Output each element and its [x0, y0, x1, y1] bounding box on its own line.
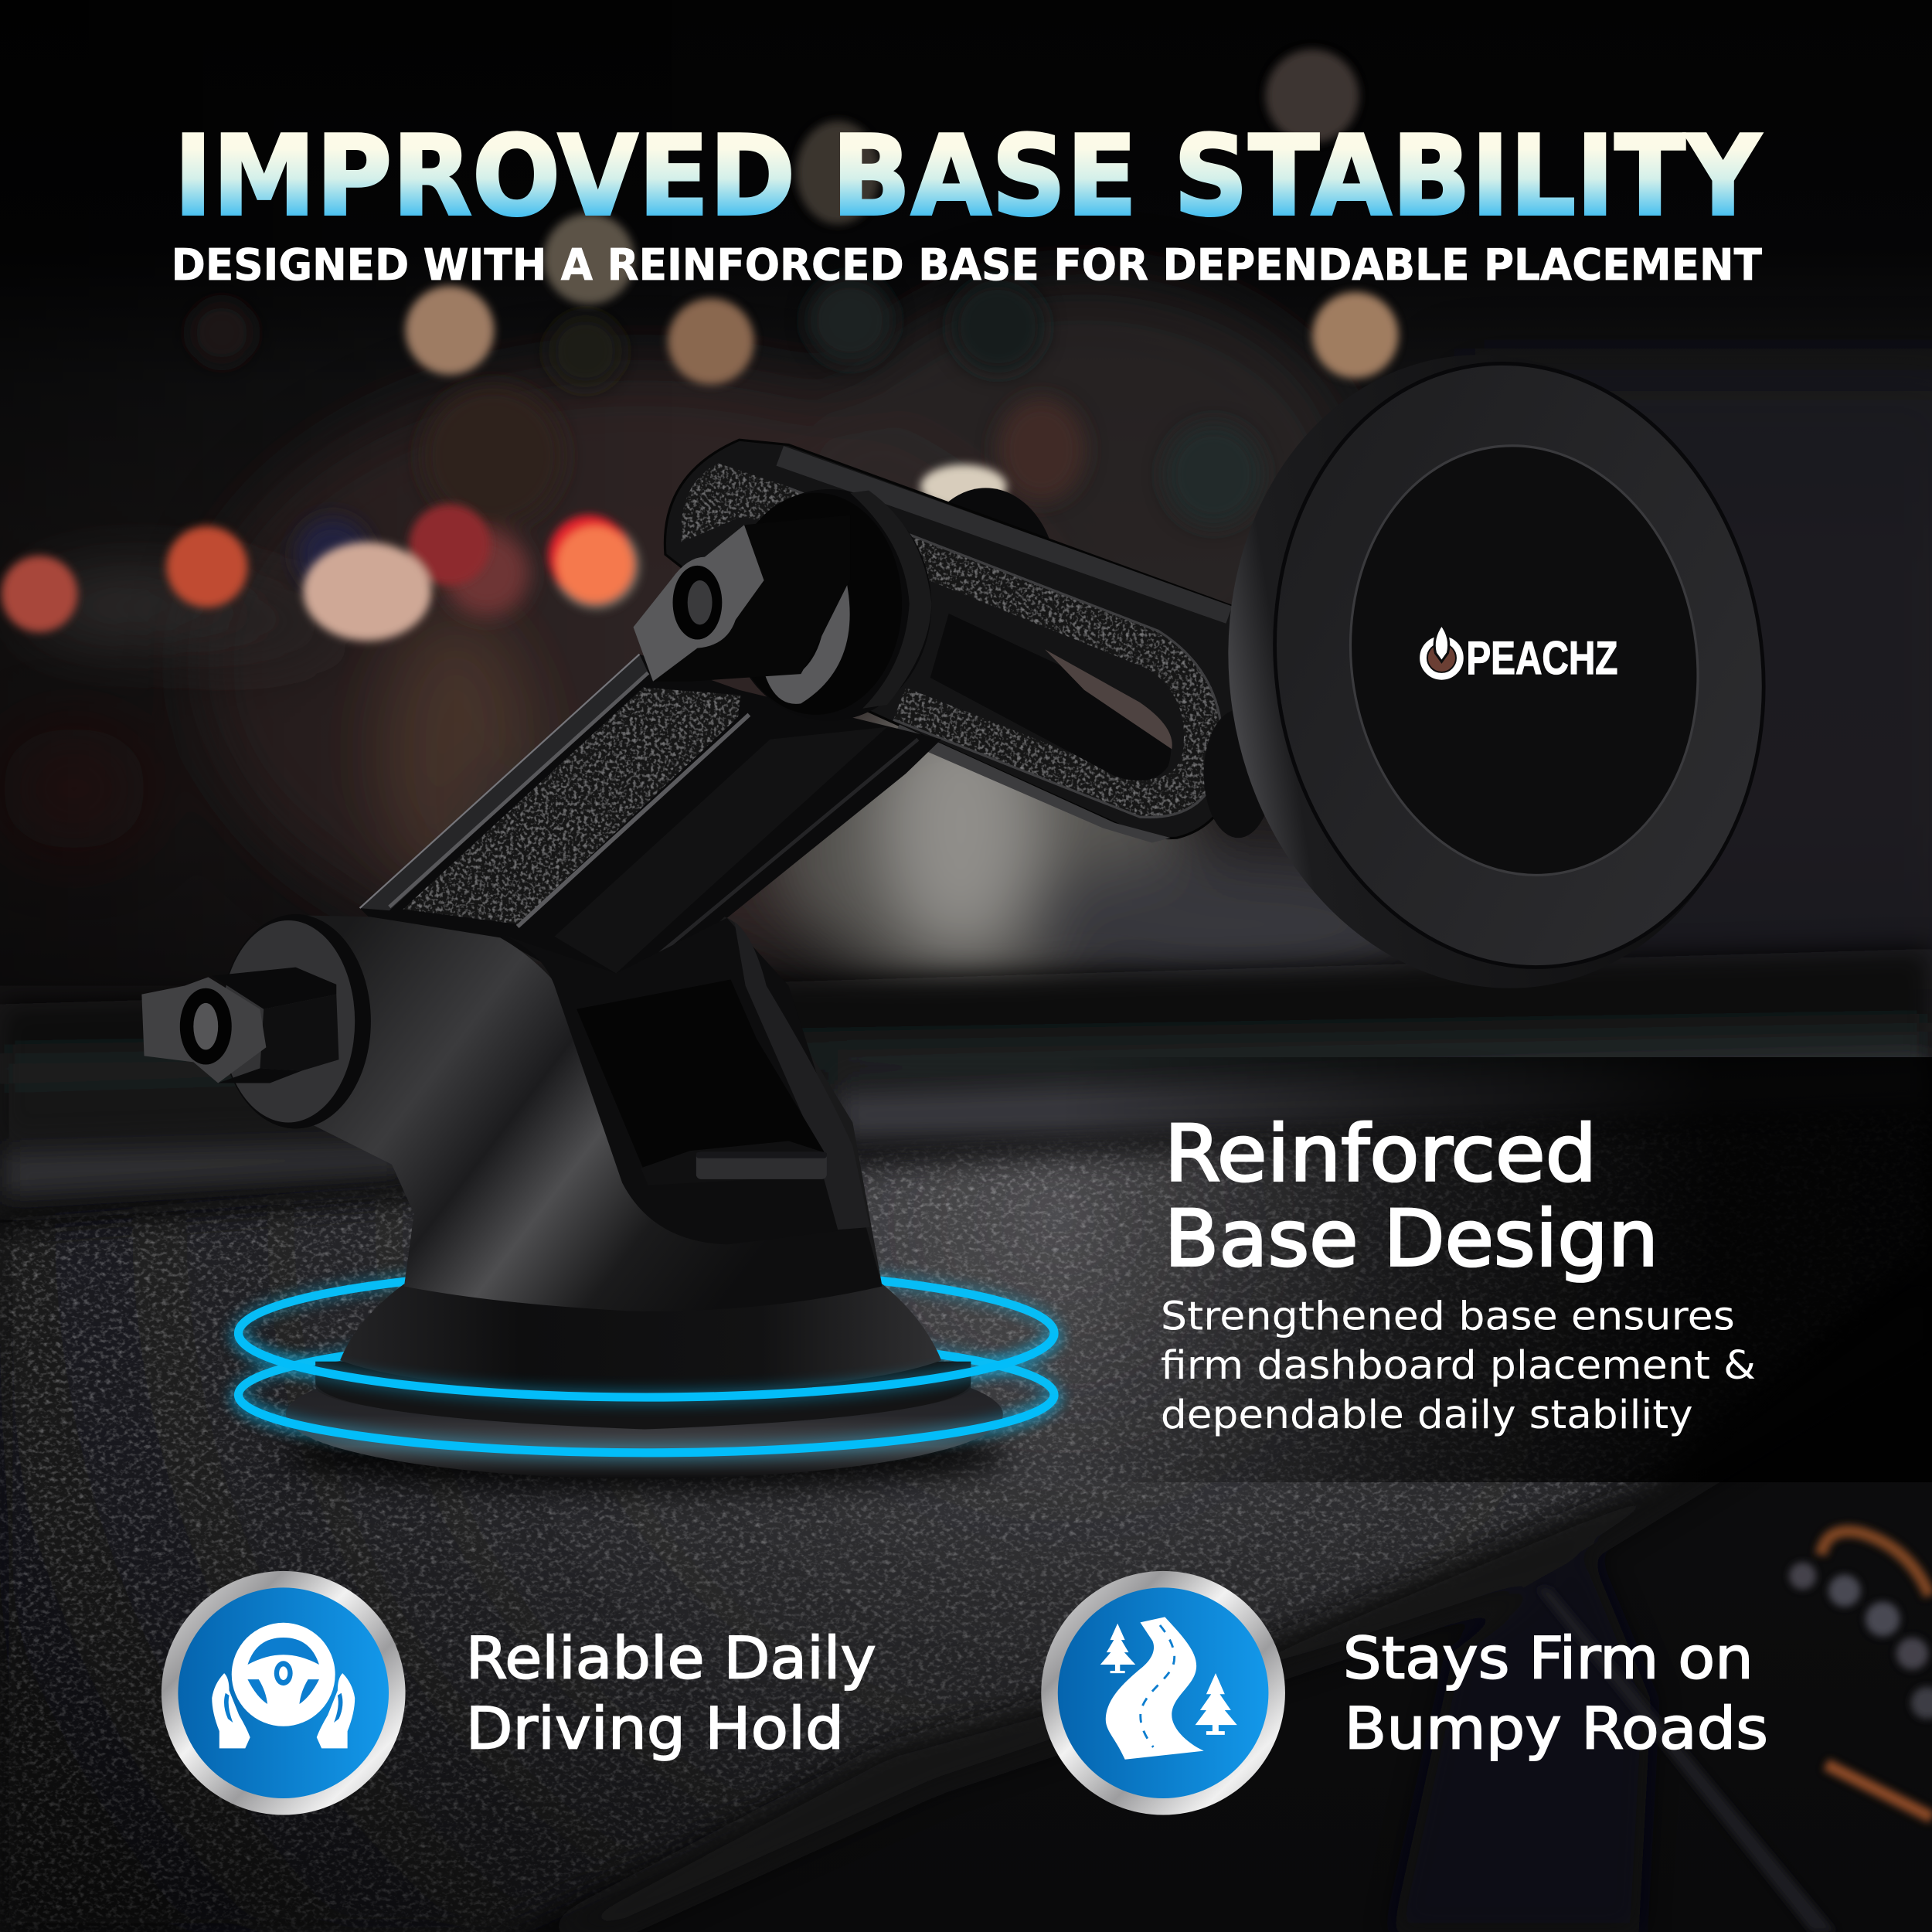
ball joint behind disc	[1204, 709, 1273, 838]
benefit text: bumpy roads: Stays Firm on	[1343, 1624, 1753, 1692]
benefit text: reliable hold: Reliable Daily	[466, 1624, 876, 1692]
pivot housing	[308, 916, 883, 1311]
bokeh lights	[2, 49, 1399, 659]
icon: hands on steering wheel badge	[162, 1571, 406, 1815]
main arm	[360, 655, 941, 1004]
dim background lights	[190, 277, 1263, 616]
benefit text: bumpy roads: Bumpy Roads	[1344, 1694, 1768, 1762]
housing window	[577, 980, 825, 1180]
feature body text: dependable daily stability	[1161, 1393, 1693, 1438]
inner dark band around window	[500, 918, 867, 1244]
locking tab	[641, 1141, 827, 1185]
product: telescopic dashboard mount	[141, 440, 1273, 1491]
glowing rings, front arcs	[239, 1333, 1054, 1453]
slotted plate	[665, 440, 1240, 843]
suction dome	[340, 1284, 941, 1393]
feature body text: firm dashboard placement &	[1161, 1343, 1756, 1389]
feature heading: Reinforced	[1165, 1108, 1597, 1199]
glowing rings, back arcs	[239, 1269, 1054, 1453]
magnetic disc	[1183, 316, 1806, 1027]
elbow shaft	[653, 515, 850, 682]
dashboard surface	[0, 1109, 1932, 1932]
panel: dark gradient behind feature text	[1060, 1057, 1932, 1482]
elbow grey collar	[765, 582, 850, 704]
left clamp knob	[141, 977, 266, 1083]
arm leather texture	[403, 688, 740, 924]
icon: winding road badge	[1041, 1571, 1285, 1815]
suction base flange	[281, 1349, 1008, 1491]
logo: PEACHZ: PEACHZ	[1466, 631, 1617, 684]
left clamp cylinder	[212, 914, 371, 1128]
elbow cylinder	[727, 489, 931, 721]
benefit text: reliable hold: Driving Hold	[466, 1694, 844, 1762]
rear support leg	[591, 917, 883, 1294]
subtitle: DESIGNED WITH A REINFORCED BASE FOR DEPENDABLE PLACEMENT	[172, 240, 1762, 291]
title: IMPROVED BASE STABILITY	[174, 111, 1762, 240]
car interior, lower right	[543, 1281, 1932, 1932]
feature heading: Base Design	[1165, 1193, 1658, 1284]
plate leather texture	[681, 463, 1223, 818]
background bands behind dashboard	[0, 949, 1932, 1219]
plate slot	[930, 614, 1171, 781]
rear telescopic joint	[914, 488, 1057, 675]
feature body text: Strengthened base ensures	[1161, 1294, 1735, 1339]
elbow knob	[634, 525, 764, 682]
logo: PEACHZ	[1423, 624, 1617, 684]
